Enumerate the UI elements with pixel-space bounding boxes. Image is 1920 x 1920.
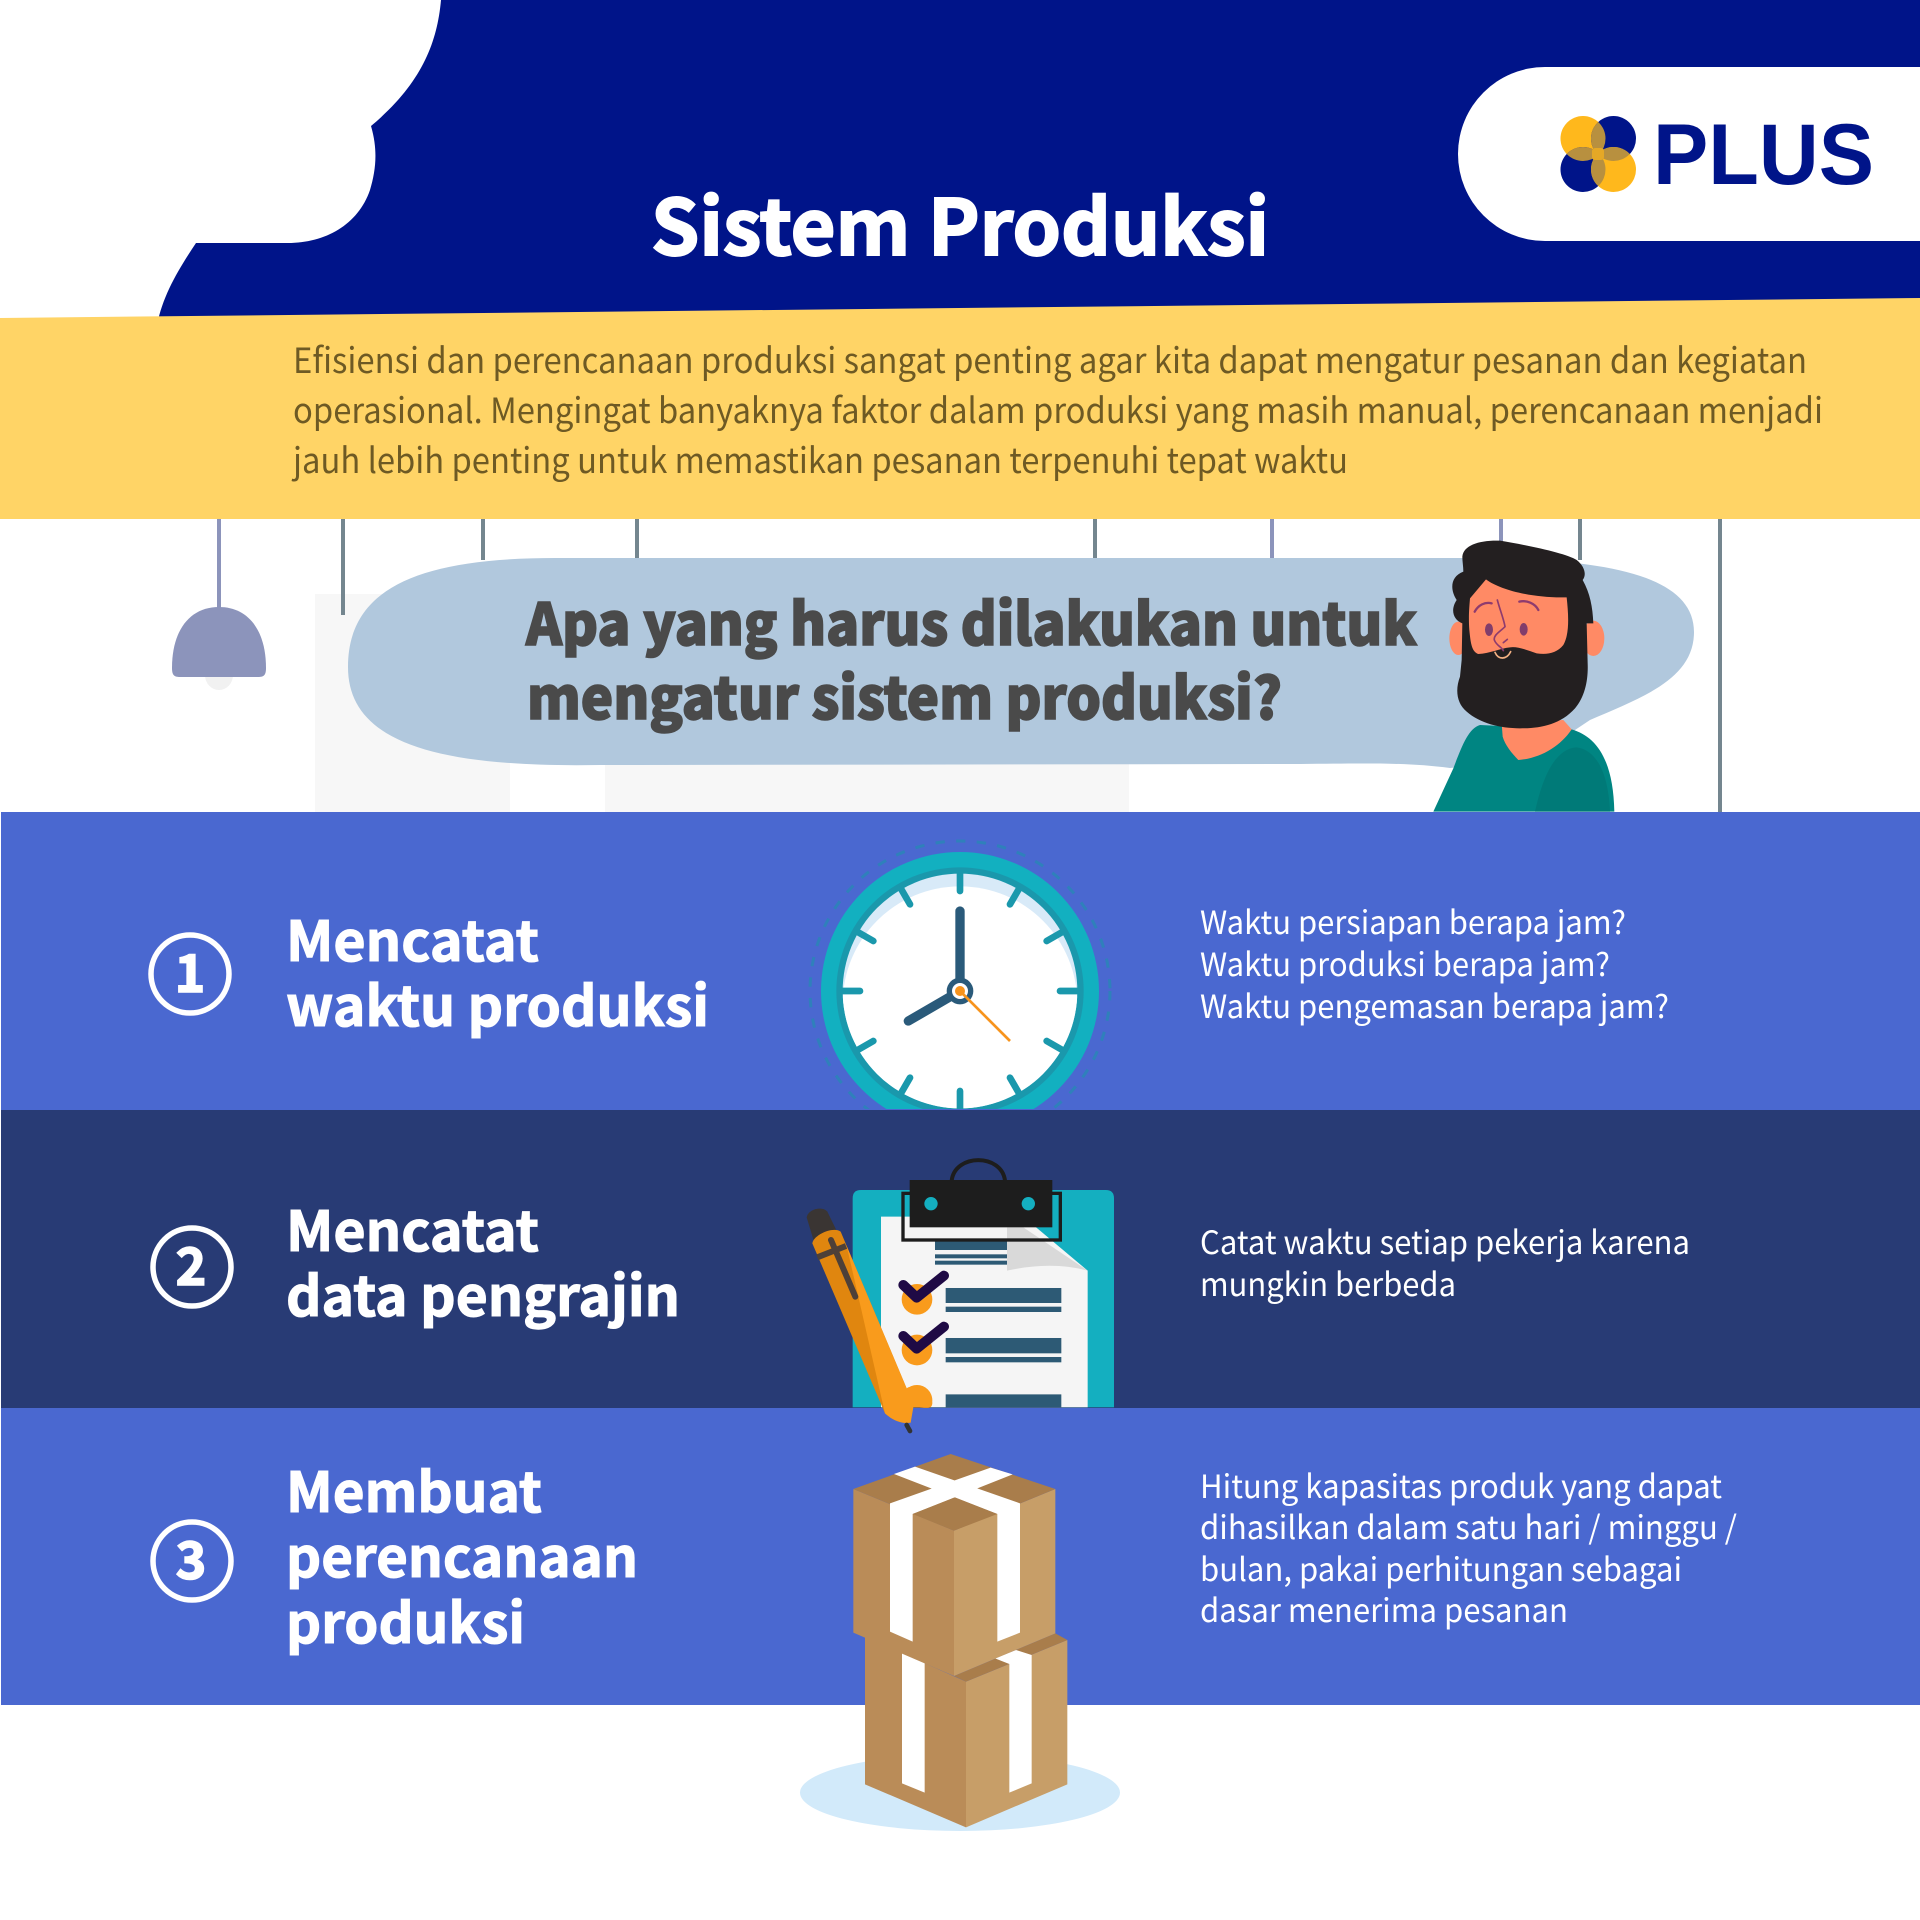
illustration: bearded man xyxy=(1433,541,1614,812)
heading: membuat perencanaan produksi xyxy=(286,1448,638,1659)
panel: row 2 band xyxy=(1,1110,1920,1408)
number badge 1: 1 xyxy=(175,932,205,1007)
face xyxy=(1469,579,1568,654)
logo pill xyxy=(1458,67,1920,241)
description: row 2: Catat waktu setiap pekerja karena xyxy=(1200,1218,1690,1264)
ears xyxy=(1449,621,1604,656)
number badge 2 xyxy=(153,1225,231,1306)
panel: row 3 band xyxy=(1,1408,1920,1705)
heading: mencatat waktu produksi: waktu produksi xyxy=(286,962,709,1042)
icon: clipboard xyxy=(853,1160,1114,1416)
icon: clock xyxy=(810,841,1110,1141)
neck xyxy=(1502,720,1572,760)
description: row 3 xyxy=(1200,1462,1737,1632)
description: row 3: dihasilkan dalam satu hari / minggu / xyxy=(1200,1503,1737,1549)
speech bubble xyxy=(348,558,1694,768)
box shadow xyxy=(800,1754,1120,1831)
icon: pen xyxy=(807,1209,932,1431)
intro text: operasional. Mengingat banyaknya faktor dalam produksi yang masih manual, perencanaan menjadi xyxy=(293,383,1823,434)
heading: membuat perencanaan produksi: produksi xyxy=(286,1579,525,1659)
icon: stacked boxes xyxy=(800,1454,1120,1831)
shirt xyxy=(1433,725,1614,812)
icon: hanging lamp xyxy=(172,607,266,690)
header background shape xyxy=(157,0,1920,325)
heading: mencatat data pengrajin: Mencatat xyxy=(286,1187,539,1267)
hanging lamp cords xyxy=(219,519,1720,812)
intro text xyxy=(291,333,1823,484)
panel: yellow intro band xyxy=(0,298,1920,519)
description: row 3: Hitung kapasitas produk yang dapat xyxy=(1200,1462,1722,1508)
question text: mengatur sistem produksi? xyxy=(527,652,1282,736)
number badge 3: 3 xyxy=(176,1519,206,1594)
panel: row 1 band xyxy=(1,812,1920,1110)
intro text: Efisiensi dan perencanaan produksi sangat penting agar kita dapat mengatur pesanan dan kegiatan xyxy=(293,333,1807,384)
background room shapes xyxy=(315,594,1129,812)
number badge 3 xyxy=(153,1519,231,1600)
description: row 3: bulan, pakai perhitungan sebagai xyxy=(1200,1545,1682,1591)
heading: mencatat waktu produksi xyxy=(286,897,709,1042)
logo wordmark: PLUS xyxy=(1653,107,1874,203)
icon: PLUS logo mark xyxy=(1560,116,1636,192)
heading: membuat perencanaan produksi: perencanaan xyxy=(286,1513,638,1593)
description: row 2 xyxy=(1200,1218,1690,1306)
question text xyxy=(525,578,1417,736)
description: row 1: Waktu persiapan berapa jam? xyxy=(1200,898,1626,944)
title: Sistem Produksi xyxy=(651,167,1269,278)
question text: Apa yang harus dilakukan untuk xyxy=(525,578,1417,662)
hair and beard xyxy=(1452,541,1593,728)
heading: mencatat data pengrajin xyxy=(286,1187,680,1332)
heading: mencatat waktu produksi: Mencatat xyxy=(286,897,539,977)
top box xyxy=(853,1454,1055,1676)
number badge 2: 2 xyxy=(176,1225,206,1300)
description: row 2: mungkin berbeda xyxy=(1200,1260,1456,1306)
bottom box xyxy=(865,1633,1067,1827)
description: row 3: dasar menerima pesanan xyxy=(1200,1586,1568,1632)
description: row 1: Waktu pengemasan berapa jam? xyxy=(1200,982,1669,1028)
facial features xyxy=(1475,600,1538,658)
heading: mencatat data pengrajin: data pengrajin xyxy=(286,1252,680,1332)
heading: membuat perencanaan produksi: Membuat xyxy=(286,1448,542,1528)
description: row 1 xyxy=(1200,898,1669,1028)
intro text: jauh lebih penting untuk memastikan pesanan terpenuhi tepat waktu xyxy=(291,433,1348,484)
description: row 1: Waktu produksi berapa jam? xyxy=(1200,940,1610,986)
number badge 1 xyxy=(151,932,229,1013)
